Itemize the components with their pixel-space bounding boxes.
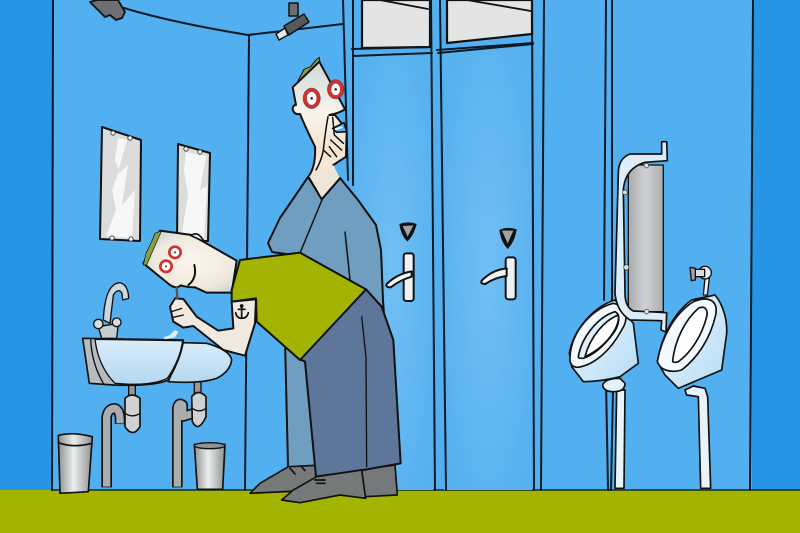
bent man bbox=[143, 231, 401, 503]
shirt bbox=[232, 253, 366, 360]
left urinal drain pipe bbox=[615, 390, 625, 488]
arm bbox=[170, 298, 256, 356]
mirror panel bbox=[628, 165, 663, 312]
camera right bbox=[276, 3, 309, 40]
front shoe bbox=[282, 470, 366, 503]
head bbox=[143, 231, 237, 293]
door handle 1 bbox=[386, 222, 417, 301]
right pipe bbox=[177, 382, 206, 487]
door 1 bbox=[353, 0, 433, 490]
door handle 2 bbox=[481, 228, 517, 299]
left pipe bbox=[107, 385, 140, 487]
right urinal bbox=[657, 295, 727, 388]
faucet bbox=[94, 283, 129, 338]
right sink bbox=[168, 343, 232, 382]
right bin bbox=[194, 444, 225, 489]
back man legs bbox=[285, 340, 330, 470]
mirror right bbox=[177, 144, 210, 241]
washbasins, pipes and bins bbox=[58, 283, 232, 493]
back man torso bbox=[268, 177, 385, 330]
back man bbox=[268, 57, 385, 470]
urinals and pipe bbox=[569, 142, 727, 488]
left sink bbox=[83, 338, 183, 385]
flush valve bbox=[690, 266, 711, 295]
top pipe frame bbox=[615, 142, 667, 332]
camera left bbox=[90, 0, 125, 20]
shoes bbox=[250, 465, 323, 493]
anchor tattoo bbox=[236, 305, 248, 318]
water splash bbox=[163, 330, 178, 339]
back man head and hand bbox=[293, 57, 347, 199]
left urinal bbox=[569, 300, 638, 382]
door 2 bbox=[444, 0, 532, 490]
mirror left bbox=[100, 127, 141, 241]
floor bbox=[0, 490, 800, 533]
left bin bbox=[58, 434, 92, 493]
pants bbox=[300, 289, 401, 477]
right urinal drain pipe bbox=[685, 386, 711, 488]
